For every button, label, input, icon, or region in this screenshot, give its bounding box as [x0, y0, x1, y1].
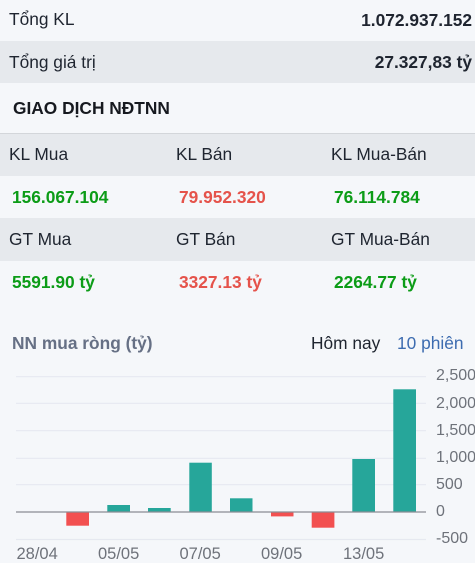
- heading: foreign investor trading: GIAO DỊCH NĐTNN: [13, 98, 170, 118]
- header row: volume labels: KL Mua-Bán: [331, 144, 427, 164]
- y axis labels: 2,000: [436, 395, 475, 412]
- chart title: NN mua ròng (tỷ): [12, 333, 153, 353]
- header row: value labels: [0, 218, 475, 261]
- header row: value labels: GT Mua-Bán: [331, 229, 430, 249]
- values row: value: 3327.13 tỷ: [179, 272, 262, 292]
- header row: volume labels: [0, 133, 475, 176]
- x axis labels: 09/05: [261, 545, 302, 563]
- values row: volume: [12, 187, 420, 207]
- y axis labels: [436, 367, 475, 547]
- values row: value: [12, 272, 417, 292]
- row: total volume: Tổng KL: [9, 9, 75, 29]
- values row: value: 2264.77 tỷ: [334, 272, 417, 292]
- bars: [66, 389, 416, 528]
- y axis labels: 1,000: [436, 449, 475, 466]
- y axis labels: 1,500: [436, 422, 475, 439]
- values row: value: 5591.90 tỷ: [12, 272, 95, 292]
- row: total value: 27.327,83 tỷ: [375, 52, 472, 72]
- header row: volume labels: KL Mua: [9, 144, 68, 164]
- row: total value: Tổng giá trị: [9, 52, 96, 72]
- y axis labels: -500: [436, 530, 468, 547]
- header row: volume labels: KL Bán: [176, 144, 232, 164]
- header row: value labels: GT Bán: [176, 229, 235, 249]
- x axis labels: [16, 545, 384, 563]
- values row: volume: 156.067.104: [12, 187, 108, 207]
- row: total volume: [9, 9, 472, 30]
- row: total value: [0, 41, 475, 83]
- y axis labels: 0: [436, 503, 445, 520]
- tab: today: Hôm nay: [311, 333, 380, 353]
- x axis labels: 13/05: [343, 545, 384, 563]
- y axis labels: 2,500: [436, 367, 475, 384]
- row: total volume: 1.072.937.152: [361, 10, 472, 30]
- x axis labels: 28/04: [16, 545, 58, 563]
- x axis labels: 05/05: [98, 545, 139, 563]
- x axis labels: 07/05: [180, 545, 221, 563]
- y axis labels: 500: [436, 476, 463, 493]
- header row: value labels: GT Mua: [9, 229, 71, 249]
- values row: volume: 76.114.784: [334, 187, 420, 207]
- values row: volume: 79.952.320: [179, 187, 266, 207]
- tab: 10 sessions: 10 phiên: [397, 333, 464, 353]
